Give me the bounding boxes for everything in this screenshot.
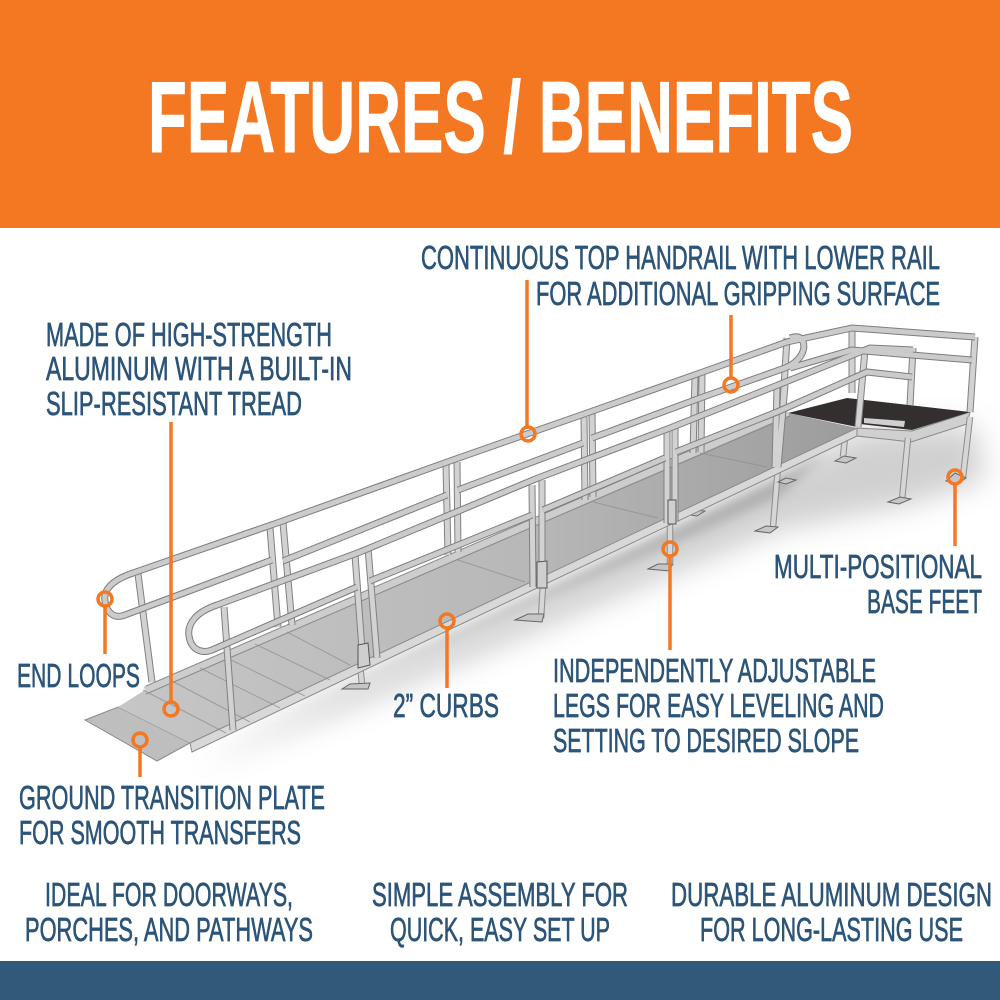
label: high-strength aluminum: SLIP-RESISTANT TREAD [46,385,302,422]
label: transition plate: FOR SMOOTH TRANSFERS [19,814,301,851]
label: transition plate: GROUND TRANSITION PLATE [19,779,325,816]
ramp deck [118,408,857,752]
ground transition plate [85,707,190,761]
callout: transition plate [133,733,147,777]
callout: base feet [948,470,962,546]
callout: curbs [440,614,454,688]
label: high-strength aluminum: ALUMINUM WITH A BUILT-IN [46,350,352,387]
handrails [105,328,975,651]
leg clamps [358,500,676,668]
label: base feet [774,548,982,620]
label: continuous handrail [421,239,940,312]
callout: continuous handrail [521,280,535,441]
ground shadow [200,425,985,765]
label: end loops: END LOOPS [17,657,140,694]
ramp illustration [85,325,975,761]
benefit: durable [671,876,992,948]
benefit: assembly: SIMPLE ASSEMBLY FOR [372,876,628,913]
landing platform [788,398,970,442]
label: high-strength aluminum [46,316,352,422]
label: adjustable legs [553,652,884,759]
far side legs and feet [342,417,970,689]
posts [138,325,975,730]
benefit: doorways: IDEAL FOR DOORWAYS, [45,876,293,913]
benefit: doorways: PORCHES, AND PATHWAYS [25,911,313,948]
label: high-strength aluminum: MADE OF HIGH-STRENGTH [46,316,332,353]
callout: adjustable legs [663,542,677,650]
callout: aluminum tread [164,422,178,716]
footer band [0,961,1000,1000]
callout: end loops [98,592,112,654]
header band [0,0,1000,228]
callout: lower rail [724,315,738,392]
label: transition plate [19,779,325,851]
label: curbs: 2” CURBS [393,687,499,724]
benefit: assembly: QUICK, EASY SET UP [390,911,610,948]
benefit: doorways [25,876,313,948]
benefit: assembly [372,876,628,948]
